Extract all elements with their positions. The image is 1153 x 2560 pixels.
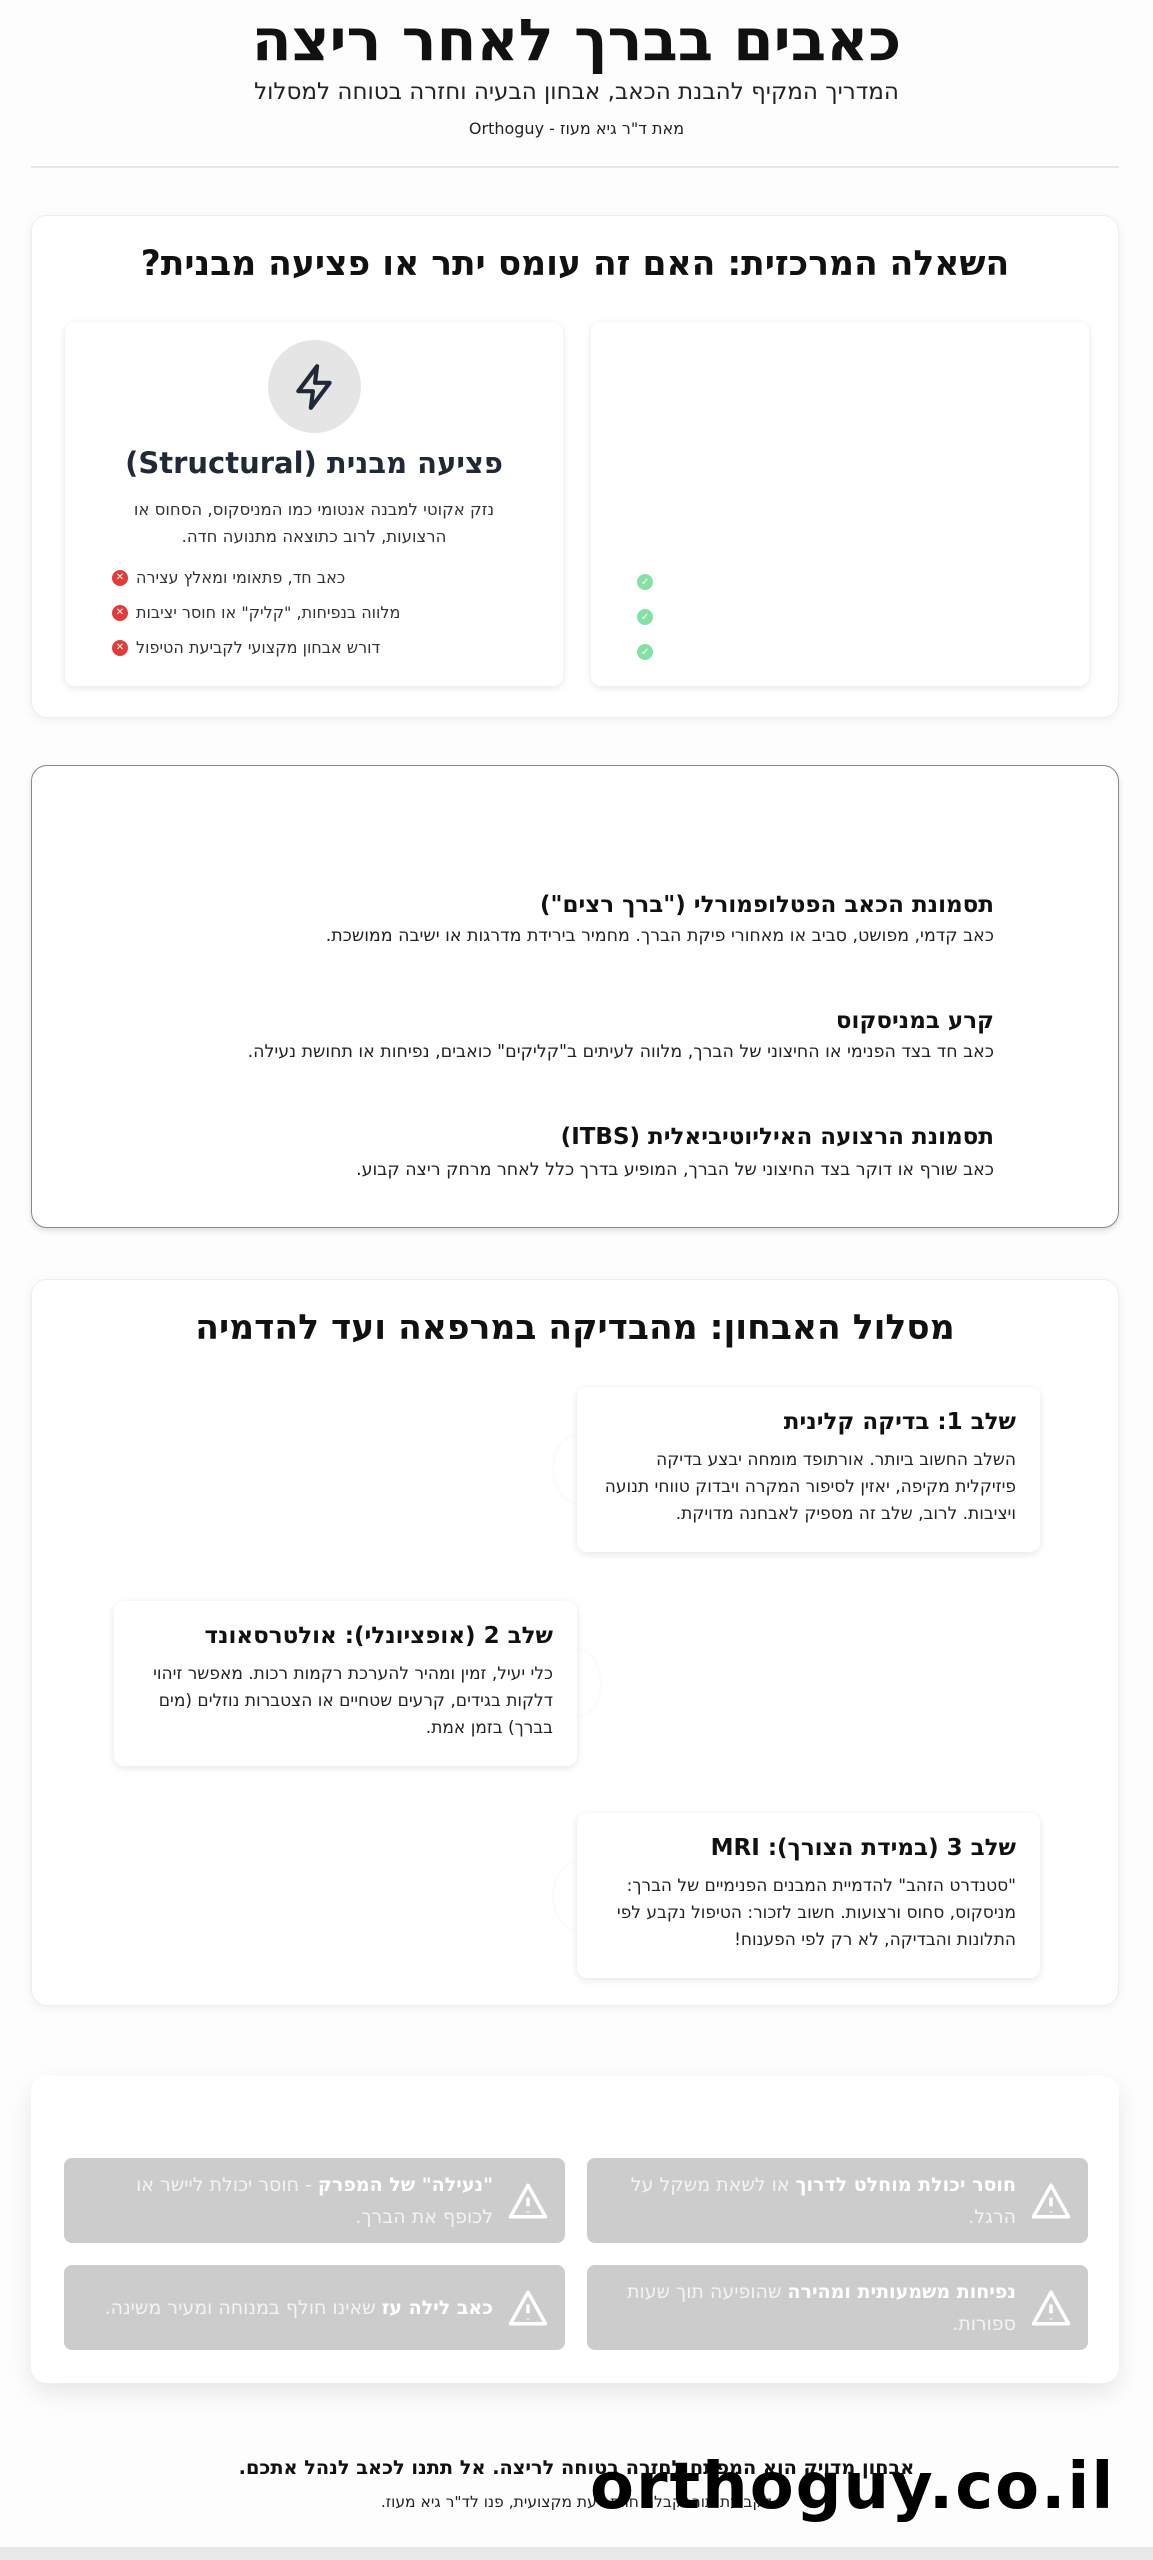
condition 2 xyxy=(248,1008,994,1062)
condition 2: קרע במניסקוס xyxy=(836,1008,994,1034)
panel: central question xyxy=(31,215,1119,718)
watermark: website: orthoguy.co.il xyxy=(590,2450,1115,2524)
green check bullets xyxy=(637,574,653,660)
bullets: מלווה בנפיחות, "קליק" או חוסר יציבות xyxy=(136,603,400,622)
condition 3 xyxy=(356,1124,994,1180)
step 1: השלב החשוב ביותר. אורתופד מומחה יבצע בדיקה פיזיקלית מקיפה, יאזין לסיפור המקרה ויבדוק טווחי תנועה ויציבות. לרוב, שלב זה מספיק לאבחנה מדויקת. xyxy=(605,1450,1016,1524)
condition 1: תסמונת הכאב הפטלופמורלי ("ברך רצים") xyxy=(540,892,994,918)
step 3: שלב 3 (במידת הצורך): MRI xyxy=(711,1835,1016,1861)
warning 3: נפיחות משמעותית ומהירה שהופיעה תוך שעות ספורות. xyxy=(627,2280,1016,2334)
icon: lightning xyxy=(268,340,361,433)
card description: נזק אקוטי למבנה אנטומי כמו המניסקוס, הסחוס או הרצועות, לרוב כתוצאה מתנועה חדה. xyxy=(134,500,494,546)
warning 4 xyxy=(64,2265,565,2350)
condition 3: תסמונת הרצועה האיליוטיביאלית (ITBS) xyxy=(561,1124,994,1150)
panel: diagnosis path xyxy=(31,1279,1119,2006)
bullets: ✕ xyxy=(116,607,124,618)
subtitle: המדריך המקיף להבנת הכאב, אבחון הבעיה וחזרה בטוחה למסלול xyxy=(254,79,899,105)
step 2 xyxy=(114,1601,577,1766)
warning 1 xyxy=(587,2158,1088,2243)
author: מאת ד"ר גיא מעוז - Orthoguy xyxy=(469,119,684,138)
bullets: ✕ xyxy=(116,572,124,583)
warning 3 xyxy=(587,2265,1088,2350)
step 3 xyxy=(577,1813,1040,1978)
footer: contact line: לקביעת תור וקבלת חוות דעת מקצועית, פנו לד"ר גיא מעוז. xyxy=(381,2493,772,2511)
heading: central question: השאלה המרכזית: האם זה עומס יתר או פציעה מבנית? xyxy=(141,244,1009,284)
bullets: דורש אבחון מקצועי לקביעת הטיפול xyxy=(136,638,380,657)
green check bullets: ✓ xyxy=(641,646,649,658)
card title: פציעה מבנית (Structural) xyxy=(125,446,503,480)
warning 2 xyxy=(64,2158,565,2243)
green check bullets: ✓ xyxy=(641,576,649,588)
panel: common conditions xyxy=(31,765,1119,1228)
condition 1: כאב קדמי, מפושט, סביב או מאחורי פיקת הברך. מחמיר בירידת מדרגות או ישיבה ממושכת. xyxy=(326,926,994,946)
bullets xyxy=(112,568,400,657)
condition 1 xyxy=(326,892,994,946)
condition 3: כאב שורף או דוקר בצד החיצוני של הברך, המופיע בדרך כלל לאחר מרחק ריצה קבוע. xyxy=(356,1160,994,1180)
title: כאבים בברך לאחר ריצה xyxy=(252,6,901,74)
warning 2: "נעילה" של המפרק - חוסר יכולת ליישר או לכופף את הברך. xyxy=(136,2174,493,2228)
condition 2: כאב חד בצד הפנימי או החיצוני של הברך, מלווה לעיתים ב"קליקים" כואבים, נפיחות או תחושת נעילה. xyxy=(248,1042,994,1062)
heading: diagnosis path: מסלול האבחון: מהבדיקה במרפאה ועד להדמיה xyxy=(195,1308,955,1348)
card: structural injury xyxy=(65,322,563,686)
warning 1: חוסר יכולת מוחלט לדרוך או לשאת משקל על הרגל. xyxy=(631,2174,1016,2228)
panel: red flags xyxy=(31,2076,1119,2383)
step 2: שלב 2 (אופציונלי): אולטרסאונד xyxy=(205,1623,553,1649)
bullets: כאב חד, פתאומי ומאלץ עצירה xyxy=(136,568,345,587)
step 3: "סטנדרט הזהב" להדמיית המבנים הפנימיים של הברך: מניסקוס, סחוס ורצועות. חשוב לזכור: הטיפול נקבע לפי התלונות והבדיקה, לא רק לפי הפענוח! xyxy=(617,1876,1016,1950)
step 1 xyxy=(577,1387,1040,1552)
warning 4: כאב לילה עז שאינו חולף במנוחה ומעיר משינה. xyxy=(105,2296,493,2318)
step 1: שלב 1: בדיקה קלינית xyxy=(784,1409,1016,1435)
bullets: ✕ xyxy=(116,642,124,653)
card: overload (empty) xyxy=(591,322,1089,686)
footer: closing message: אבחון מדויק הוא המפתח לחזרה בטוחה לריצה. אל תתנו לכאב לנהל אתכם. xyxy=(239,2456,914,2479)
step 2: כלי יעיל, זמין ומהיר להערכת רקמות רכות. מאפשר זיהוי דלקות בגידים, קרעים שטחיים או הצטברות נוזלים (מים בברך) בזמן אמת. xyxy=(153,1664,553,1738)
timeline circles xyxy=(554,1436,600,1502)
green check bullets: ✓ xyxy=(641,612,649,622)
